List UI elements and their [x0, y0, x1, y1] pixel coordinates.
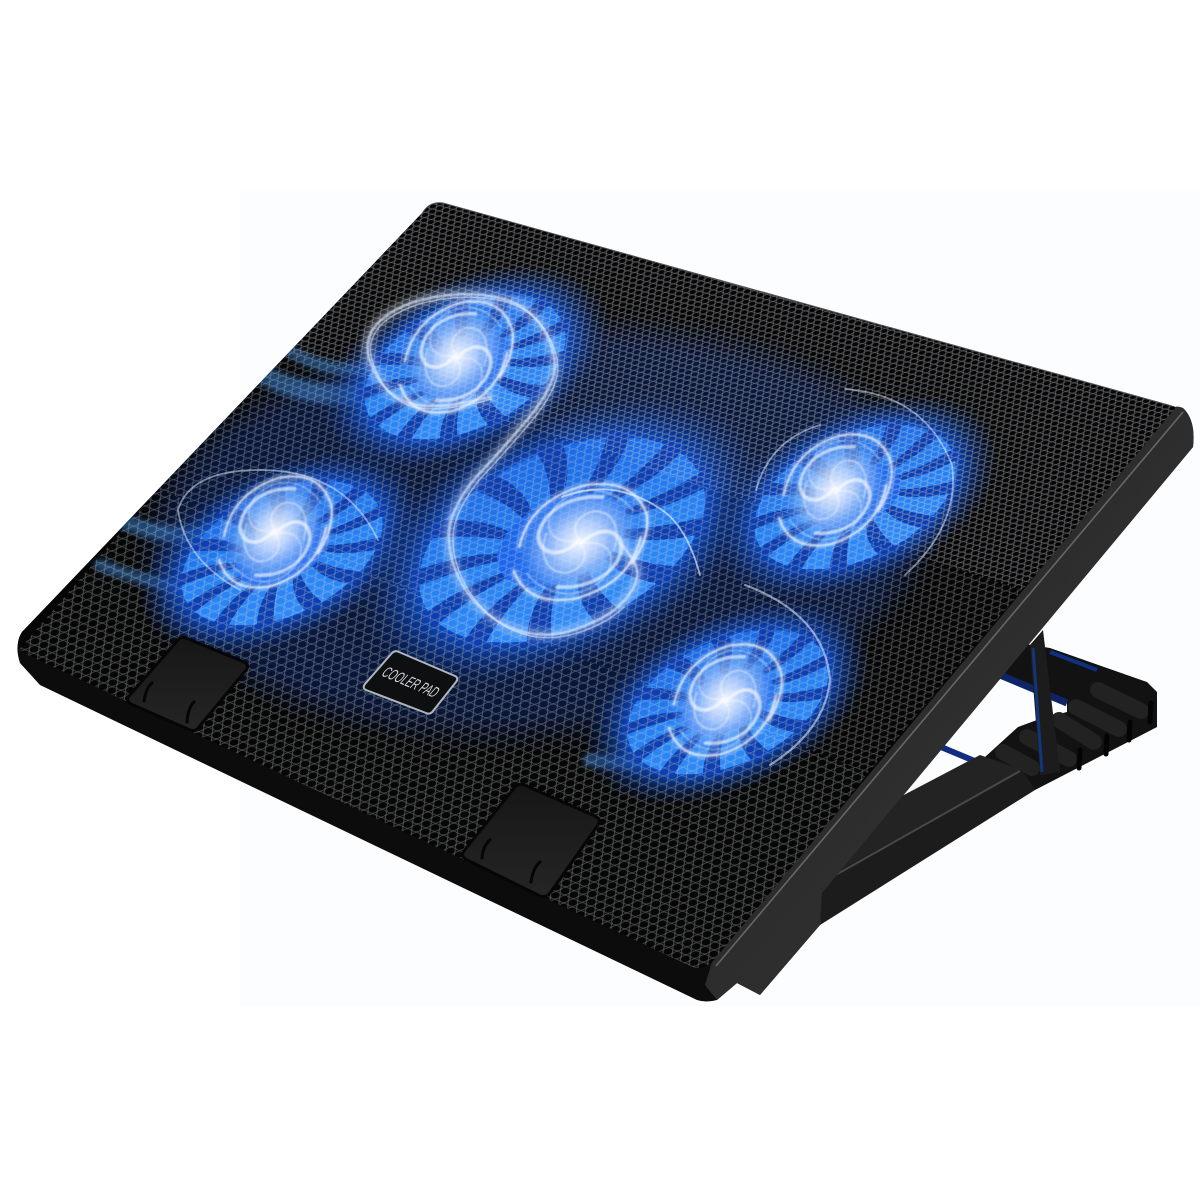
swirl: centre fan — [508, 478, 653, 606]
swirl: top fan — [396, 298, 518, 418]
ambient blue glow — [137, 303, 943, 757]
mesh near band — [10, 489, 868, 985]
centre fan outer ring — [562, 489, 700, 575]
large spiral strokes — [178, 294, 953, 765]
stand lower face — [820, 770, 1035, 925]
top rim edge — [423, 203, 1172, 406]
right side bezel — [705, 407, 1194, 1000]
swirl: lower right fan — [665, 640, 786, 760]
air stream wisps — [100, 345, 720, 762]
fan: right — [723, 396, 996, 596]
ratchet teeth — [1003, 690, 1151, 768]
lower right fan arc — [745, 585, 830, 765]
stand ridge highlight — [832, 771, 1020, 877]
fan: centre — [368, 400, 754, 680]
bezel edge highlight — [716, 412, 1183, 966]
blue rail stripe — [1050, 652, 1097, 670]
mesh middle band — [158, 351, 1022, 773]
pad body silhouette — [17, 203, 1194, 1001]
perforated top surface base — [18, 203, 1175, 968]
right fan arc — [756, 389, 953, 575]
S-curve second strand — [370, 297, 624, 638]
swirl: left fan — [214, 472, 336, 592]
rubber foot right — [463, 784, 599, 897]
fans and mesh layer — [10, 190, 1190, 985]
S-curve spiral — [368, 294, 637, 635]
stand upper wedge — [823, 755, 1022, 883]
S-curve spiral halo — [368, 294, 637, 635]
background tint — [240, 191, 1200, 1006]
fan: top — [328, 266, 605, 466]
foot slits — [144, 683, 194, 722]
right foot slits — [482, 840, 540, 882]
stand back plate with ratchet — [985, 640, 1157, 790]
left fan arc — [178, 470, 378, 590]
blue support rod lower — [941, 747, 977, 762]
fan: lower right — [588, 603, 868, 803]
strut blue stripe — [1033, 648, 1042, 772]
prop strut — [1030, 630, 1060, 775]
swirl: right fan — [774, 430, 896, 550]
blue support rod upper — [1000, 675, 1067, 703]
mesh far band — [291, 190, 1190, 590]
product illustration: laptop cooling pad — [17, 202, 1194, 1002]
rubber foot left — [127, 637, 248, 731]
fan: left — [142, 454, 417, 652]
stand: rear support base — [820, 630, 1157, 925]
badge label: COOLER PAD — [378, 664, 444, 701]
cooler pad badge — [364, 651, 457, 714]
